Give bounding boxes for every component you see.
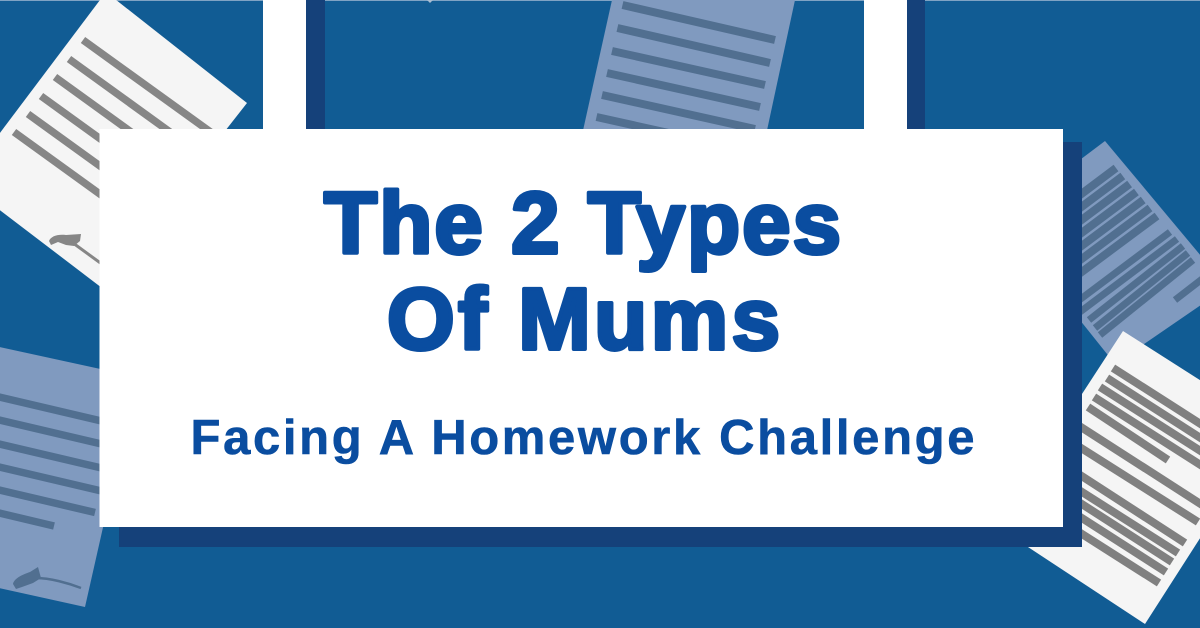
title card — [100, 129, 1063, 527]
white document, top left — [0, 0, 247, 288]
icon: signature — [49, 234, 110, 270]
subheading: Facing A Homework Challenge — [190, 411, 974, 465]
faded document, top centre — [582, 0, 795, 140]
faded document, bottom left — [0, 345, 137, 607]
heading line 2: Of Mums — [387, 271, 780, 368]
heading line 1: The 2 Types — [324, 175, 841, 272]
white document, bottom right — [996, 331, 1200, 624]
icon: signature — [13, 567, 81, 589]
faded document, right — [1000, 141, 1200, 364]
card shadow — [119, 142, 1082, 547]
white vertical strips behind card — [263, 0, 925, 129]
